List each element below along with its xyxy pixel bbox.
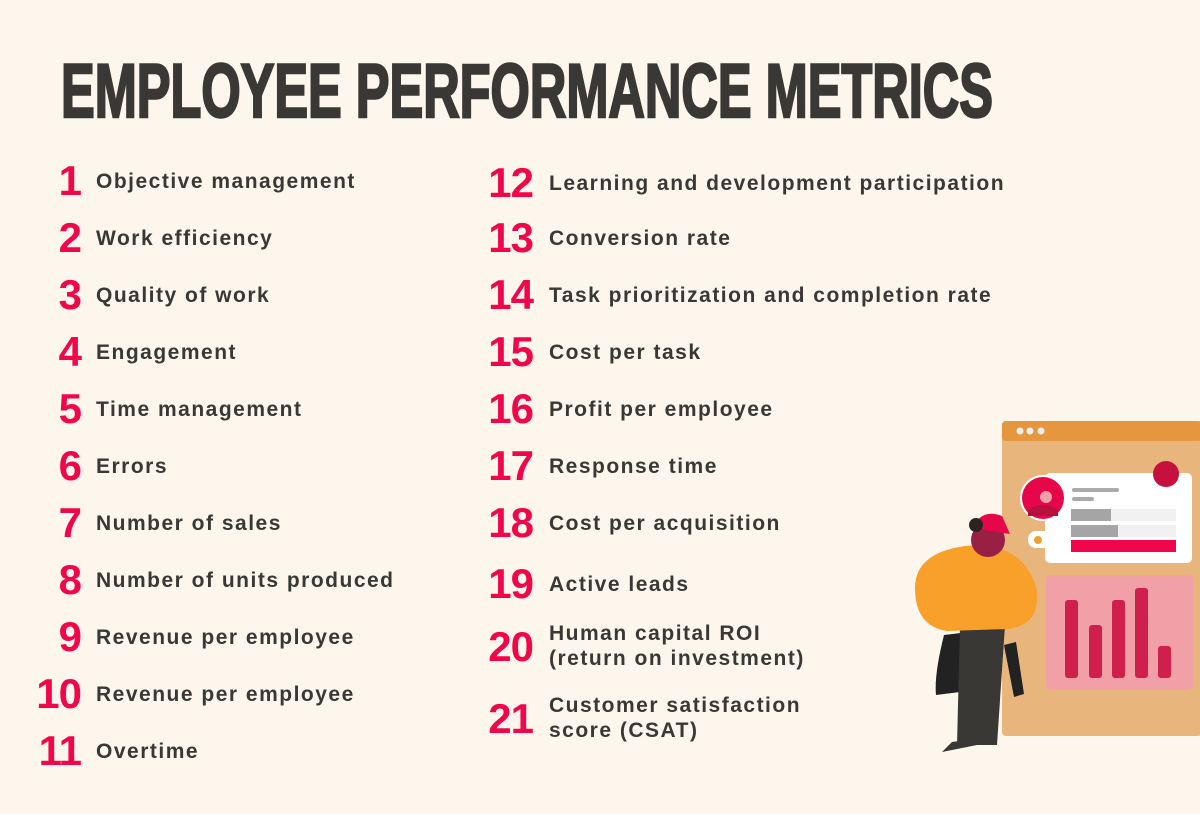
item 2: Work efficiency <box>96 227 273 250</box>
illustration: dashboard and person <box>915 421 1200 752</box>
item 11 <box>39 727 199 774</box>
item 7: 7 <box>59 499 81 546</box>
item 9: 9 <box>59 613 81 660</box>
item 21: Customer satisfaction <box>549 694 801 717</box>
item 15: 15 <box>488 328 533 375</box>
item 13: 13 <box>488 214 533 261</box>
item 8 <box>59 556 394 603</box>
item 7 <box>59 499 282 546</box>
item 19 <box>488 560 690 607</box>
item 8: 8 <box>59 556 81 603</box>
item 6 <box>59 442 168 489</box>
item 12: 12 <box>488 159 533 206</box>
bar chart <box>1046 575 1193 690</box>
item 13 <box>488 214 731 261</box>
item 4 <box>59 328 237 375</box>
item 2 <box>59 214 273 261</box>
item 18: Cost per acquisition <box>549 512 781 535</box>
item 20: Human capital ROI <box>549 622 761 645</box>
item 5: Time management <box>96 398 303 421</box>
item 9: Revenue per employee <box>96 626 355 649</box>
item 3: 3 <box>59 271 81 318</box>
item 10 <box>36 670 355 717</box>
item 12: Learning and development participation <box>549 172 1005 195</box>
item 21: score (CSAT) <box>549 719 698 742</box>
item 18 <box>488 499 781 546</box>
profile card <box>1020 461 1192 563</box>
item 9 <box>59 613 355 660</box>
item 5: 5 <box>59 385 81 432</box>
item 15: Cost per task <box>549 341 702 364</box>
item 19: 19 <box>488 560 533 607</box>
item 1: 1 <box>59 157 81 204</box>
item 15 <box>488 328 702 375</box>
item 6: 6 <box>59 442 81 489</box>
item 13: Conversion rate <box>549 227 731 250</box>
item 14: 14 <box>488 271 533 318</box>
item 16: 16 <box>488 385 533 432</box>
item 16: Profit per employee <box>549 398 774 421</box>
item 21 <box>488 694 801 742</box>
item 17 <box>488 442 718 489</box>
item 17: Response time <box>549 455 718 478</box>
item 11: 11 <box>39 727 81 774</box>
item 4: Engagement <box>96 341 237 364</box>
item 7: Number of sales <box>96 512 282 535</box>
item 14: Task prioritization and completion rate <box>549 284 992 307</box>
item 20 <box>488 622 805 670</box>
item 21: 21 <box>488 695 533 742</box>
item 8: Number of units produced <box>96 569 394 592</box>
item 11: Overtime <box>96 740 199 763</box>
item 1: Objective management <box>96 170 356 193</box>
item 16 <box>488 385 774 432</box>
item 14 <box>488 271 992 318</box>
item 3 <box>59 271 270 318</box>
item 20: (return on investment) <box>549 647 805 670</box>
item 17: 17 <box>488 442 533 489</box>
item 20: 20 <box>488 623 533 670</box>
item 10: Revenue per employee <box>96 683 355 706</box>
person <box>915 514 1037 752</box>
item 10: 10 <box>36 670 81 717</box>
item 2: 2 <box>59 214 81 261</box>
item 12 <box>488 159 1005 206</box>
item 1 <box>59 157 356 204</box>
item 4: 4 <box>59 328 81 375</box>
item 5 <box>59 385 303 432</box>
browser window <box>1002 421 1200 736</box>
item 18: 18 <box>488 499 533 546</box>
item 19: Active leads <box>549 573 690 596</box>
item 6: Errors <box>96 455 168 478</box>
item 3: Quality of work <box>96 284 270 307</box>
